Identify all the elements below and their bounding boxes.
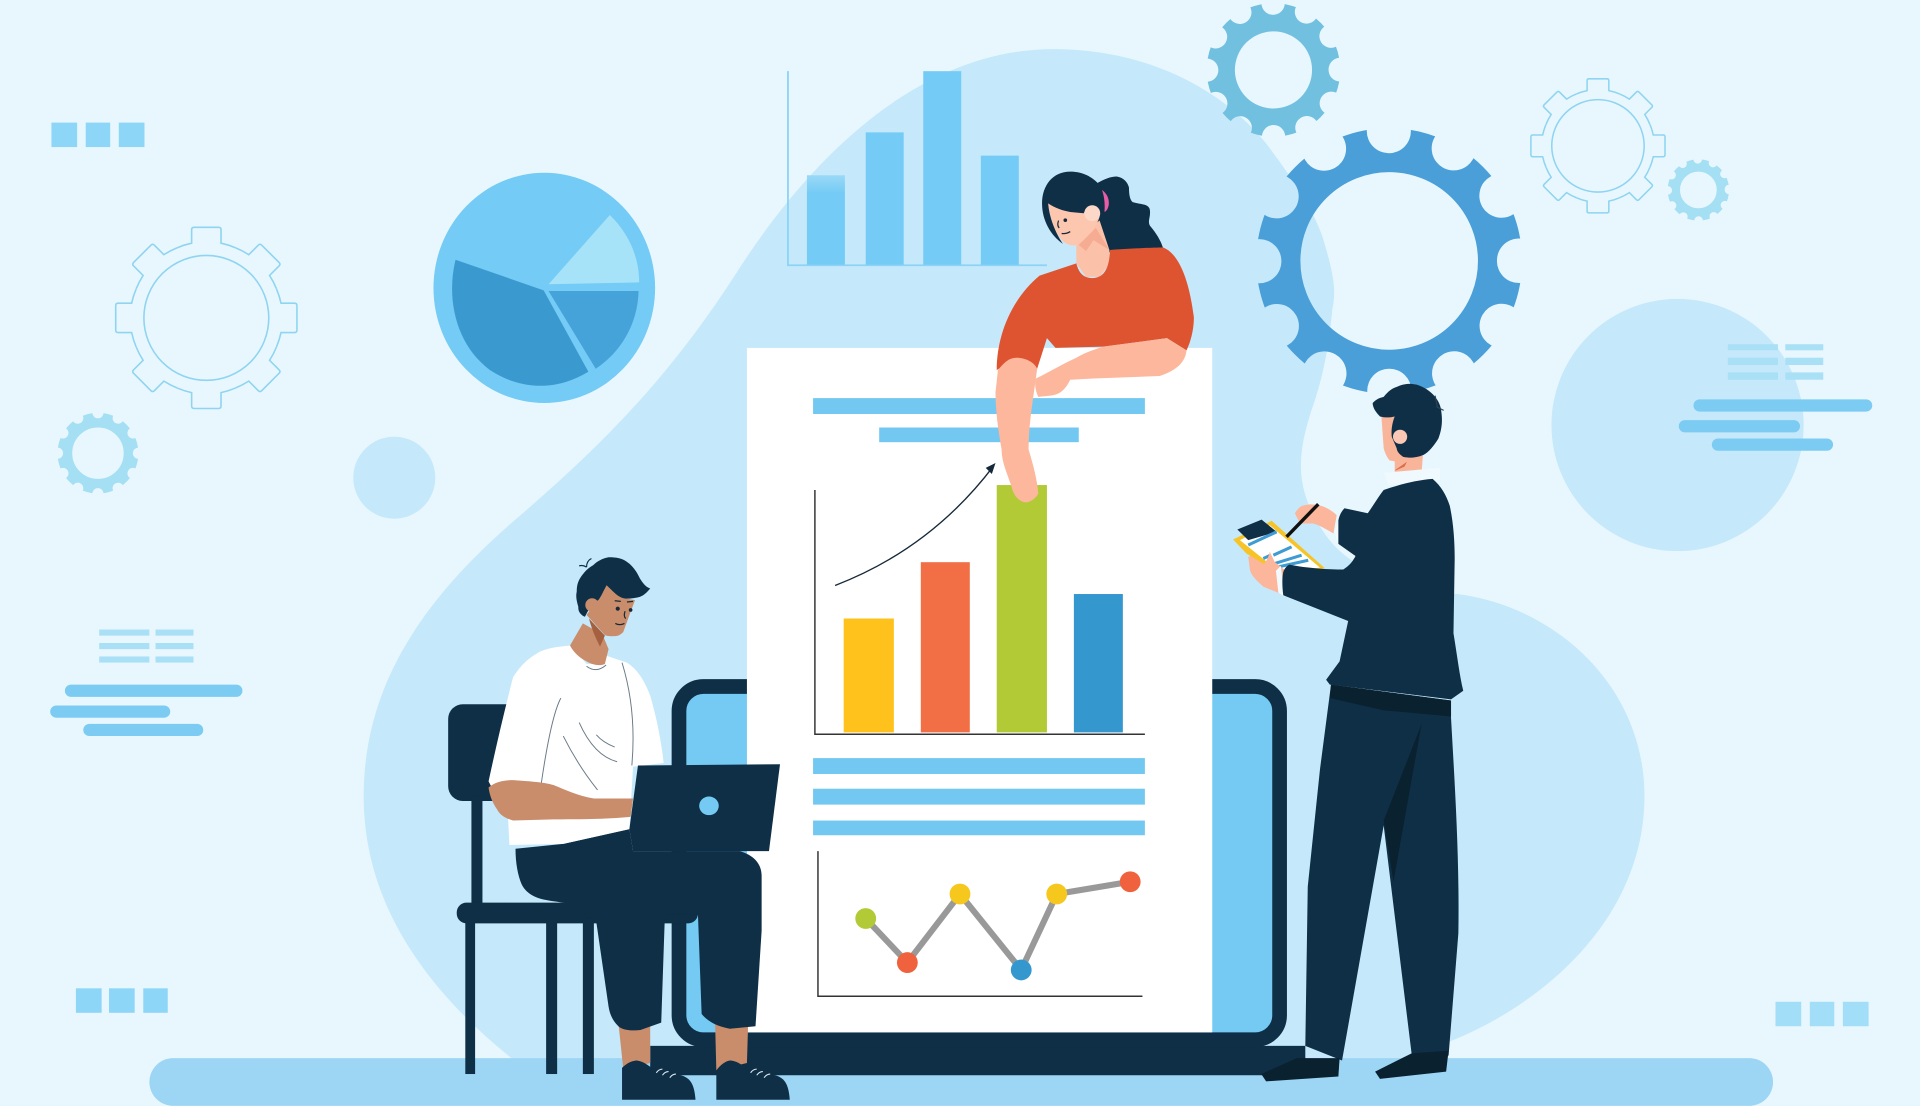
man arm xyxy=(489,780,633,821)
big gear xyxy=(1278,150,1500,372)
pen xyxy=(1287,504,1318,537)
trousers xyxy=(1305,685,1459,1061)
ear xyxy=(1393,430,1407,444)
laptop logo xyxy=(699,797,719,815)
text lines left xyxy=(50,630,242,736)
shirt creases xyxy=(541,663,633,790)
face xyxy=(1381,407,1420,462)
clipboard lines xyxy=(1248,532,1308,567)
woman ponytail xyxy=(1095,176,1163,252)
seated man with laptop xyxy=(448,557,790,1100)
woman face xyxy=(1048,194,1100,246)
thumb xyxy=(1261,552,1285,583)
top bar chart xyxy=(788,71,1047,265)
monitor xyxy=(679,686,1280,1040)
jacket xyxy=(1282,479,1463,699)
laptop xyxy=(629,764,780,851)
man neck shadow xyxy=(589,619,605,647)
background blob xyxy=(364,49,1644,1061)
woman right arm xyxy=(1035,338,1187,397)
woman hair tie xyxy=(1102,190,1109,212)
outline gear top right xyxy=(1531,79,1665,213)
background circle left xyxy=(353,437,435,519)
man trousers xyxy=(516,829,762,1030)
standing man with clipboard xyxy=(1233,384,1463,1081)
collar xyxy=(1384,468,1440,485)
clipboard paper xyxy=(1240,525,1320,572)
woman neck xyxy=(1076,221,1110,277)
monitor base xyxy=(650,1046,1305,1075)
hair xyxy=(1373,384,1442,458)
man legs skin xyxy=(618,1023,748,1070)
neck xyxy=(1395,456,1423,475)
woman front hair xyxy=(1042,172,1103,244)
man shoes xyxy=(622,1061,790,1100)
clipboard xyxy=(1233,504,1337,594)
man hair xyxy=(576,557,650,617)
man shirt xyxy=(489,645,664,845)
hair strands xyxy=(1435,396,1444,410)
man face xyxy=(587,584,635,636)
woman facial features xyxy=(1058,219,1070,234)
man ear xyxy=(585,598,599,612)
squares bottom left xyxy=(76,988,168,1013)
clipboard board xyxy=(1233,521,1325,573)
woman neck shadow xyxy=(1079,228,1109,251)
text lines right xyxy=(1679,344,1872,451)
report body lines xyxy=(813,758,1145,835)
top gear xyxy=(1221,17,1326,123)
woman ear xyxy=(1084,205,1100,221)
trouser shade xyxy=(1384,724,1422,882)
woman shirt xyxy=(997,247,1194,370)
ground strip xyxy=(149,1058,1773,1106)
pie chart xyxy=(433,173,655,403)
squares top left xyxy=(51,123,144,147)
shoes xyxy=(1261,1051,1449,1081)
upper hand xyxy=(1295,504,1337,534)
man facial features xyxy=(615,601,633,625)
small gear left xyxy=(65,420,131,486)
neck shadow xyxy=(1395,462,1407,470)
woman left arm xyxy=(996,358,1038,502)
shoe laces xyxy=(656,1069,770,1078)
man hair strands xyxy=(579,559,591,567)
report heading lines xyxy=(813,398,1145,442)
background circle right xyxy=(1551,299,1804,551)
chair xyxy=(448,704,698,1074)
report document xyxy=(747,348,1212,1032)
bar chart with trend arrow xyxy=(815,463,1145,734)
squares bottom right xyxy=(1776,1002,1869,1026)
cuffs xyxy=(1276,518,1342,596)
woman leaning over report xyxy=(996,172,1194,502)
man neck xyxy=(570,623,609,665)
outline gear left xyxy=(116,227,297,409)
waistband xyxy=(1330,685,1451,716)
lower hand xyxy=(1248,549,1286,594)
line chart xyxy=(818,851,1142,996)
clipboard clip xyxy=(1237,520,1277,540)
small gear right xyxy=(1674,165,1723,214)
